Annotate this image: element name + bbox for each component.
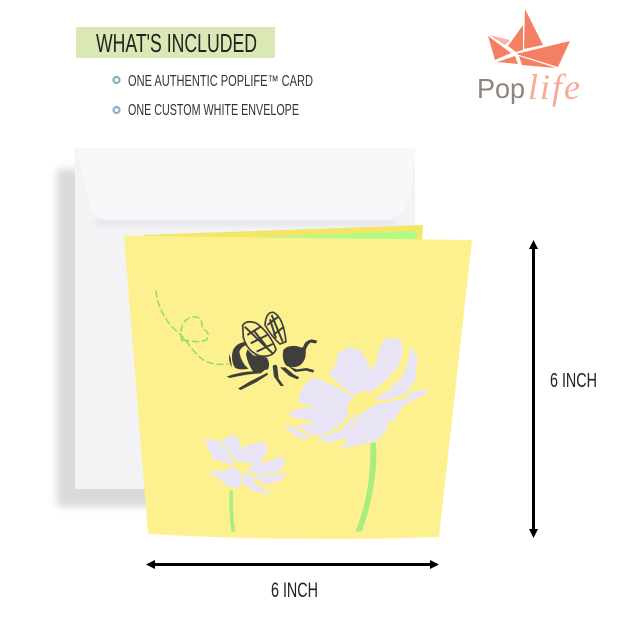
item: poplife card	[114, 73, 313, 90]
list of included items	[114, 73, 313, 119]
width dimension arrow	[146, 560, 439, 569]
small flower petals	[206, 435, 286, 494]
bee thorax and antenna	[283, 339, 317, 367]
card back panel	[143, 225, 423, 245]
bee wings	[243, 312, 286, 356]
large flower petals	[285, 339, 428, 448]
logo wordmark: Pop	[477, 73, 525, 104]
bee legs	[227, 367, 268, 378]
icon: origami boat	[488, 9, 570, 68]
large flower centre	[347, 391, 375, 414]
card green inner edge	[235, 231, 417, 245]
item: white envelope	[114, 102, 299, 119]
large flower stem	[356, 442, 376, 532]
small flower	[206, 435, 286, 532]
logo wordmark	[477, 67, 580, 107]
item: white envelope: ONE CUSTOM WHITE ENVELOPE	[128, 102, 299, 119]
logo wordmark: life	[528, 67, 580, 107]
height label: 6 INCH	[550, 370, 597, 392]
card front panel	[124, 236, 472, 539]
height dimension arrow	[529, 240, 538, 538]
pop-up card	[124, 225, 472, 539]
envelope body	[75, 148, 415, 489]
width label: 6 INCH	[271, 579, 318, 602]
heading: what's included	[76, 27, 275, 58]
heading: what's included: WHAT'S INCLUDED	[96, 28, 257, 58]
small flower stem	[229, 490, 235, 532]
envelope flap	[76, 148, 415, 225]
icon: bee	[227, 312, 317, 390]
bee abdomen	[229, 354, 232, 367]
envelope shadow	[57, 169, 297, 507]
dashed bee flight path	[156, 291, 228, 364]
large flower	[285, 339, 428, 532]
item: poplife card: ONE AUTHENTIC POPLIFE™ CARD	[128, 73, 313, 90]
envelope	[57, 148, 415, 507]
logo: poplife	[477, 9, 580, 107]
